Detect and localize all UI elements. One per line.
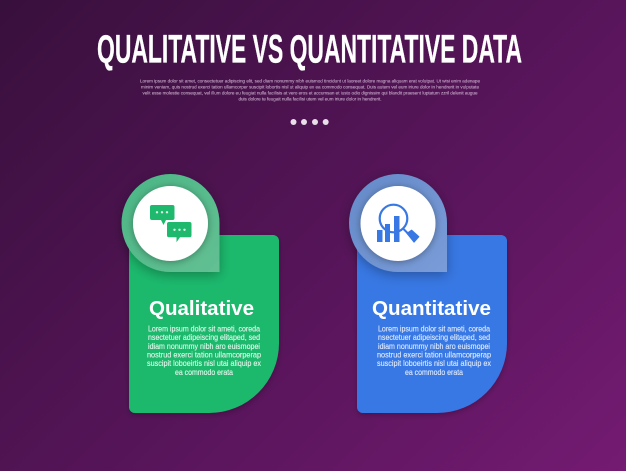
body text: quantitative: ea commodo erata [405, 367, 463, 377]
white icon circle [360, 186, 436, 261]
green pin badge [122, 174, 220, 272]
intro text block [140, 78, 480, 102]
white icon circle [133, 186, 208, 261]
blue pin badge [349, 174, 447, 272]
heading: qualitative: Qualitative [149, 298, 254, 320]
icon: magnifier with bar chart [377, 205, 419, 242]
body text: quantitative: Lorem ipsum dolor sit ameti, coreda [378, 324, 490, 334]
body text: qualitative [147, 324, 262, 377]
intro text block: velit esse molestie consequat, vel illum dolore eu feugiat nulla facilisis at vero eros et accumsan et iusto odio dignissim qui blandit praesent luptatum zzril delenit augue [142, 90, 478, 96]
body text: quantitative: nostrud exerci tation ullamcorperap [377, 350, 491, 360]
body text: quantitative: idiam nonummy nibh aro euismopei [378, 341, 490, 351]
icon: speech bubbles [150, 205, 192, 242]
body text: quantitative: nsectetuer adipeiscing elitaped, sed [378, 332, 490, 342]
intro text block: minim veniam, quis nostrud exerci tation ullamcorper suscipit lobortis nisl ut aliquip ex ea commodo consequat. Duis autem vel eum iriure dolor in hendrerit in vulputate [141, 84, 479, 90]
body text: qualitative: idiam nonummy nibh aro euismopei [148, 341, 260, 351]
body text: qualitative: Lorem ipsum dolor sit ameti, coreda [148, 324, 260, 334]
panel: qualitative [122, 174, 279, 413]
body text: qualitative: nostrud exerci tation ullamcorperap [147, 350, 261, 360]
heading: quantitative: Quantitative [372, 298, 491, 320]
panel: quantitative [349, 174, 507, 413]
green card [129, 235, 279, 413]
body text: qualitative: nsectetuer adipeiscing elitaped, sed [148, 332, 260, 342]
body text: quantitative: suscipit loboeirtis nisl utai aliquip ex [377, 358, 492, 368]
blue card [357, 235, 507, 413]
intro text block: duis dolore te feugait nulla facilisi utem vel eum iriure dolor in hendrerit. [238, 96, 382, 102]
body text: quantitative [377, 324, 492, 377]
pagination dots [290, 119, 329, 125]
body text: qualitative: suscipit loboeirtis nisl utai aliquip ex [147, 358, 262, 368]
body text: qualitative: ea commodo erata [175, 367, 233, 377]
intro text block: Lorem ipsum dolor sit amet, consectetuer adipiscing elit, sed diam nonummy nibh euismod tincidunt ut laoreet dolore magna aliquam erat volutpat. Ut wisi enim adenape [140, 78, 480, 84]
